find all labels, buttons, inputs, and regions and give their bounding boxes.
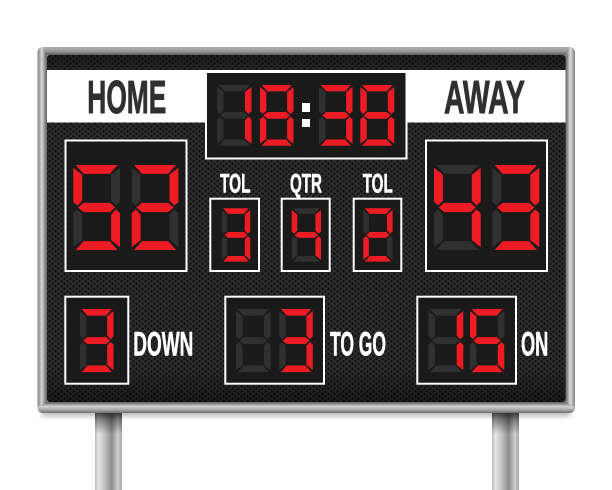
to go digit 3 — [279, 309, 313, 372]
away score digit 4 — [434, 165, 481, 250]
scoreboard frame — [38, 47, 575, 413]
left support post — [95, 410, 122, 490]
clock digit 8 — [360, 85, 394, 146]
ball on digit 5 — [470, 309, 504, 372]
clock digit 3 — [319, 85, 352, 146]
game clock panel — [206, 72, 406, 158]
home score digit 5 — [73, 165, 120, 250]
label: TO GO: TO GO — [330, 325, 386, 363]
team name banner — [47, 70, 566, 122]
clock digit 1 — [217, 85, 252, 146]
home score digit 2 — [132, 165, 178, 250]
board drop shadow — [42, 408, 570, 416]
ball on panel — [417, 297, 516, 384]
label: TOL home: TOL — [220, 169, 250, 199]
ball on digit 1 — [428, 309, 463, 372]
clock digit 8 — [260, 85, 294, 146]
away score panel — [426, 140, 547, 271]
label: ON: ON — [521, 325, 548, 363]
label: DOWN: DOWN — [133, 325, 193, 363]
away timeouts panel — [354, 199, 401, 271]
label: TOL away: TOL — [363, 169, 393, 199]
home timeouts panel — [210, 199, 259, 271]
clock colon — [302, 103, 310, 127]
away score digit 3 — [492, 165, 539, 250]
right support post — [492, 410, 519, 490]
label: HOME: HOME — [87, 71, 166, 123]
to go unlit digit — [236, 309, 270, 372]
label: AWAY: AWAY — [444, 71, 525, 123]
to go panel — [225, 297, 324, 384]
quarter panel — [282, 199, 330, 271]
down panel — [65, 297, 128, 384]
label: QTR: QTR — [290, 169, 322, 199]
home score panel — [66, 140, 186, 271]
